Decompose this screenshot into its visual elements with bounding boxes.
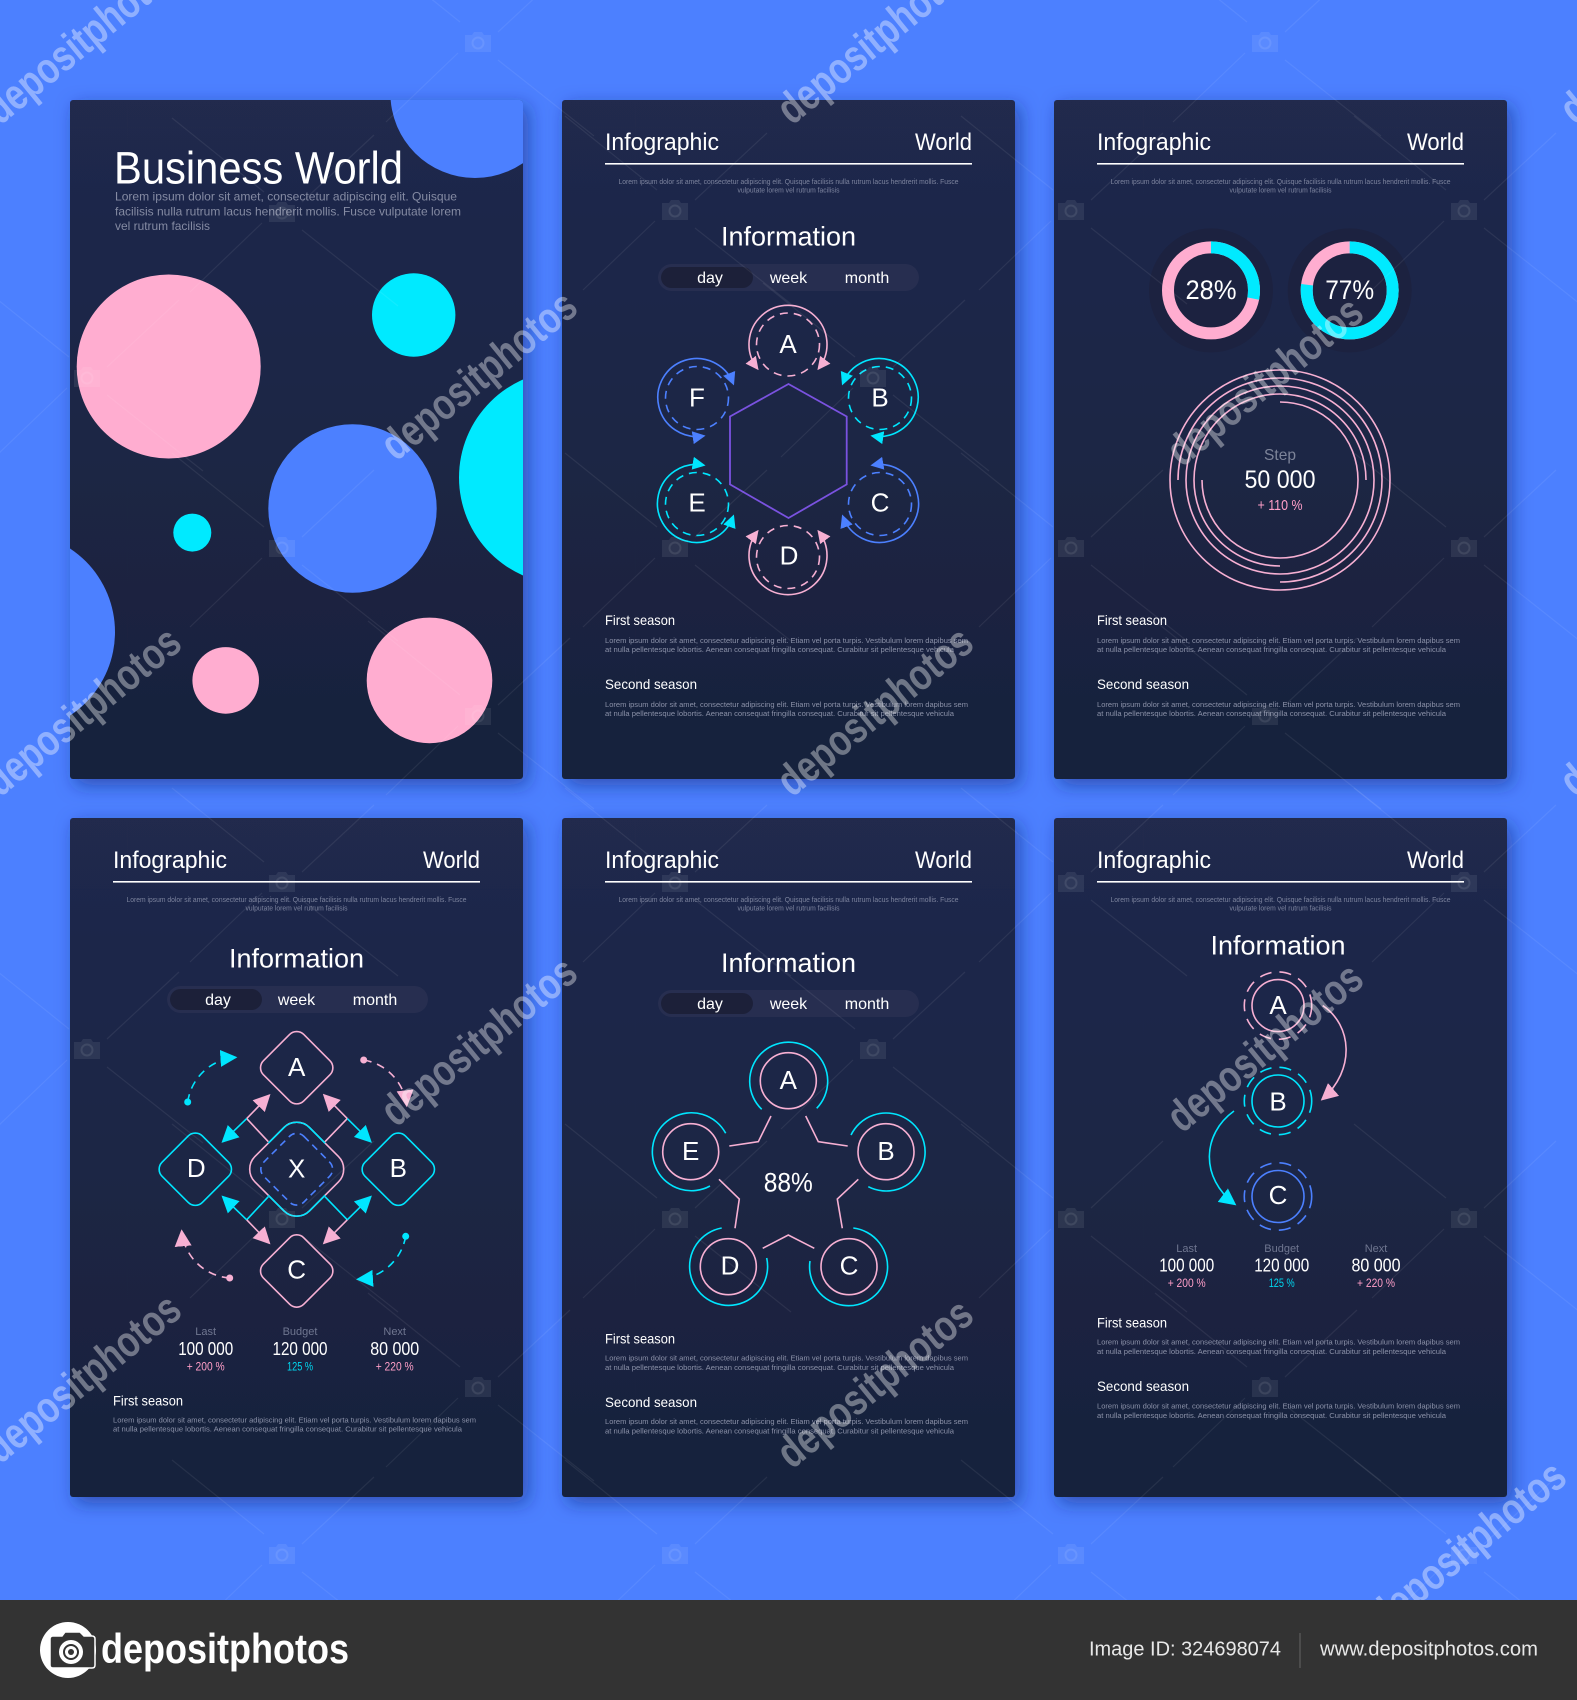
heading: information: Information: [721, 222, 856, 252]
first season text: Lorem ipsum dolor sit amet, consectetur adipiscing elit. Etiam vel porta turpis. Vestibulum lorem dapibus sem: [1097, 1340, 1460, 1346]
second season text: at nulla pellentesque lobortis. Aenean consequat fringilla consequat. Curabitur sit pellentesque vehicula: [1097, 1413, 1446, 1420]
stats: Budget: [1264, 1243, 1299, 1255]
first season text: at nulla pellentesque lobortis. Aenean consequat fringilla consequat. Curabitur sit pellentesque vehicula: [1097, 1349, 1446, 1356]
second season text: at nulla pellentesque lobortis. Aenean consequat fringilla consequat. Curabitur sit pellentesque vehicula: [605, 711, 954, 718]
header: Infographic: [1097, 847, 1211, 874]
second season text: Second season: [605, 676, 697, 692]
header: Infographic: [605, 847, 719, 874]
diamond D: [155, 1129, 236, 1210]
header: World: [915, 129, 972, 156]
stats: + 220 %: [376, 1359, 414, 1373]
donut 77%: 77%: [1325, 275, 1374, 305]
stats: Next: [1365, 1243, 1387, 1255]
first season text: Lorem ipsum dolor sit amet, consectetur adipiscing elit. Etiam vel porta turpis. Vestibulum lorem dapibus sem: [605, 638, 968, 645]
stats: 80 000: [1352, 1256, 1400, 1276]
panel: flow steps: [1054, 818, 1507, 1497]
first season text: Lorem ipsum dolor sit amet, consectetur adipiscing elit. Etiam vel porta turpis. Vestibulum lorem dapibus sem: [605, 1356, 968, 1363]
title: Business World: [114, 142, 403, 194]
icon: camera logo: [40, 1622, 96, 1678]
diamond X: X: [288, 1154, 305, 1184]
spiral chart: 50 000: [1244, 466, 1316, 494]
heading: information: Information: [1210, 930, 1346, 960]
subtitle: [115, 190, 461, 233]
subtitle: Lorem ipsum dolor sit amet, consectetur adipiscing elit. Quisque: [115, 190, 457, 204]
diamond C: C: [287, 1254, 306, 1284]
node E: E: [688, 488, 706, 518]
first season text: First season: [605, 1330, 675, 1346]
node E: [657, 464, 733, 542]
stats: + 220 %: [1357, 1276, 1395, 1290]
tabs: day: [205, 992, 231, 1009]
tabs: day: [697, 996, 723, 1013]
node E: [652, 1113, 726, 1191]
second season text: [605, 1394, 968, 1436]
node E: E: [682, 1136, 699, 1166]
stats: Budget: [283, 1326, 317, 1338]
header: [605, 847, 972, 913]
footer bar: [0, 1600, 1577, 1700]
image id: Image ID: 324698074: [1089, 1639, 1281, 1661]
second season text: Second season: [1097, 1378, 1189, 1394]
diamond B: [358, 1129, 439, 1210]
tabs: [658, 990, 919, 1017]
watermark: text: depositphotos: [371, 281, 587, 470]
tabs: month: [353, 992, 397, 1009]
donut 28%: [1149, 228, 1273, 352]
tabs: week: [769, 996, 808, 1013]
header: World: [915, 847, 972, 874]
first season text: at nulla pellentesque lobortis. Aenean consequat fringilla consequat. Curabitur sit pellentesque vehicula: [1097, 647, 1446, 654]
header: Lorem ipsum dolor sit amet, consectetur adipiscing elit. Quisque facilisis nulla rutrum lacus hendrerit mollis. Fusce: [126, 897, 467, 904]
header: Infographic: [605, 129, 719, 156]
second season text: Lorem ipsum dolor sit amet, consectetur adipiscing elit. Etiam vel porta turpis. Vestibulum lorem dapibus sem: [605, 1419, 968, 1426]
second season text: [1097, 676, 1460, 718]
center value: 88%: [764, 1168, 813, 1198]
node A: A: [779, 329, 797, 359]
first season text: First season: [605, 612, 675, 628]
separator: [1300, 1633, 1301, 1668]
heading: information: Information: [721, 948, 856, 978]
header: vulputate lorem vel rutrum facilisis: [246, 906, 348, 913]
tabs: [167, 986, 428, 1013]
header: Infographic: [1097, 129, 1211, 156]
first season text: at nulla pellentesque lobortis. Aenean consequat fringilla consequat. Curabitur sit pellentesque vehicula: [605, 647, 954, 654]
second season text: [1097, 1378, 1460, 1420]
subtitle: facilisis nulla rutrum lacus hendrerit mollis. Fusce vulputate lorem: [115, 204, 461, 218]
second season text: Second season: [605, 1394, 697, 1410]
first season text: Lorem ipsum dolor sit amet, consectetur adipiscing elit. Etiam vel porta turpis. Vestibulum lorem dapibus sem: [113, 1418, 476, 1424]
logo text: depositphotos: [101, 1625, 349, 1672]
stats: Next: [383, 1326, 406, 1338]
step A: A: [1269, 990, 1287, 1020]
second season text: at nulla pellentesque lobortis. Aenean consequat fringilla consequat. Curabitur sit pellentesque vehicula: [1097, 711, 1446, 718]
first season text: at nulla pellentesque lobortis. Aenean consequat fringilla consequat. Curabitur sit pellentesque vehicula: [113, 1427, 462, 1434]
node F: F: [689, 382, 705, 412]
tabs: week: [277, 992, 316, 1009]
step B: [1244, 1067, 1312, 1135]
node B: [851, 1113, 925, 1191]
watermark: text: depositphotos: [767, 1289, 983, 1478]
watermark: text: depositphotos: [1157, 287, 1373, 476]
diamond X: [242, 1115, 351, 1224]
header: Lorem ipsum dolor sit amet, consectetur adipiscing elit. Quisque facilisis nulla rutrum lacus hendrerit mollis. Fusce: [1110, 179, 1451, 186]
first season text: [605, 612, 968, 654]
stats: 120 000: [1254, 1256, 1309, 1276]
node D: D: [780, 540, 798, 570]
panel: business world cover: [64, 96, 538, 796]
diamond A: [256, 1027, 337, 1108]
second season text: Lorem ipsum dolor sit amet, consectetur adipiscing elit. Etiam vel porta turpis. Vestibulum lorem dapibus sem: [605, 702, 968, 709]
second season text: [605, 676, 968, 718]
node A: [750, 1042, 828, 1109]
header: vulputate lorem vel rutrum facilisis: [1230, 188, 1332, 195]
header: vulputate lorem vel rutrum facilisis: [738, 188, 840, 195]
stats: [1159, 1243, 1400, 1290]
tabs: week: [769, 270, 808, 287]
tabs: day: [697, 270, 723, 287]
donut 28%: 28%: [1186, 275, 1236, 305]
panel: donuts and spiral: [1054, 100, 1507, 779]
first season text: at nulla pellentesque lobortis. Aenean consequat fringilla consequat. Curabitur sit pellentesque vehicula: [605, 1365, 954, 1372]
hexagon: [730, 384, 847, 518]
spiral chart: Step: [1264, 447, 1296, 464]
diamond C: [256, 1231, 337, 1311]
node B: [843, 358, 918, 436]
stats: Last: [1176, 1243, 1197, 1255]
watermark: text: depositphotos: [767, 617, 983, 806]
watermark: text: depositphotos: [371, 947, 587, 1136]
stats: 100 000: [178, 1339, 233, 1359]
node F: [658, 358, 733, 436]
header: vulputate lorem vel rutrum facilisis: [1230, 906, 1332, 913]
header: [113, 847, 480, 913]
watermark: text: depositphotos: [1157, 953, 1373, 1142]
node D: [749, 526, 827, 595]
second season text: Lorem ipsum dolor sit amet, consectetur adipiscing elit. Etiam vel porta turpis. Vestibulum lorem dapibus sem: [1097, 1404, 1460, 1410]
first season text: Lorem ipsum dolor sit amet, consectetur adipiscing elit. Etiam vel porta turpis. Vestibulum lorem dapibus sem: [1097, 638, 1460, 645]
spiral chart: + 110 %: [1258, 497, 1302, 514]
first season text: [1097, 612, 1460, 654]
node B: B: [877, 1136, 895, 1166]
node C: C: [871, 488, 889, 518]
panel: hexagon cycle: [562, 100, 1015, 779]
header: [605, 129, 972, 195]
step C: [1244, 1163, 1312, 1230]
first season text: [1097, 1314, 1460, 1356]
stats: + 200 %: [1168, 1276, 1206, 1290]
stats: + 200 %: [187, 1359, 225, 1373]
tabs: month: [845, 996, 889, 1013]
node D: [690, 1228, 768, 1305]
connectors: [719, 1116, 858, 1248]
orbit arrows: [182, 1056, 409, 1282]
header: Lorem ipsum dolor sit amet, consectetur adipiscing elit. Quisque facilisis nulla rutrum lacus hendrerit mollis. Fusce: [618, 897, 959, 904]
diamond B: B: [390, 1153, 407, 1183]
decorative circles: [70, 100, 523, 744]
header: Lorem ipsum dolor sit amet, consectetur adipiscing elit. Quisque facilisis nulla rutrum lacus hendrerit mollis. Fusce: [618, 179, 959, 186]
node D: D: [721, 1250, 739, 1280]
subtitle: vel rutrum facilisis: [115, 219, 210, 233]
node C: [810, 1228, 888, 1306]
node C: C: [840, 1250, 858, 1280]
step B: B: [1269, 1086, 1287, 1116]
stats: 125 %: [1269, 1276, 1295, 1290]
stats: 120 000: [272, 1339, 328, 1359]
header: vulputate lorem vel rutrum facilisis: [738, 906, 840, 913]
second season text: Second season: [1097, 676, 1189, 692]
stats: 100 000: [1159, 1256, 1214, 1276]
node A: [749, 305, 827, 376]
spiral chart: [1170, 370, 1390, 590]
node B: B: [871, 382, 889, 412]
second season text: Lorem ipsum dolor sit amet, consectetur adipiscing elit. Etiam vel porta turpis. Vestibulum lorem dapibus sem: [1097, 702, 1460, 709]
header: World: [423, 847, 480, 874]
tabs: month: [845, 270, 889, 287]
website: www.depositphotos.com: [1319, 1639, 1538, 1661]
header: World: [1407, 847, 1464, 874]
first season text: [605, 1330, 968, 1372]
header: Infographic: [113, 847, 227, 874]
first season text: First season: [113, 1392, 183, 1408]
stats: [178, 1326, 419, 1373]
header: [1097, 847, 1464, 913]
diamond A: A: [288, 1052, 306, 1082]
panel: pentagon diagram: [562, 818, 1015, 1497]
step A: [1244, 972, 1312, 1039]
stats: 125 %: [287, 1359, 313, 1373]
arrow A to B: [1322, 1006, 1346, 1100]
first season text: First season: [1097, 1314, 1167, 1330]
node A: A: [780, 1065, 798, 1095]
donut 77%: [1288, 228, 1412, 352]
connector arrows: [223, 1095, 371, 1243]
header: Lorem ipsum dolor sit amet, consectetur adipiscing elit. Quisque facilisis nulla rutrum lacus hendrerit mollis. Fusce: [1110, 897, 1451, 904]
arrow B to C: [1209, 1111, 1235, 1204]
panel: diamond diagram: [70, 818, 523, 1497]
second season text: at nulla pellentesque lobortis. Aenean consequat fringilla consequat. Curabitur sit pellentesque vehicula: [605, 1429, 954, 1436]
heading: information: Information: [229, 944, 364, 974]
header: [1097, 129, 1464, 195]
step C: C: [1269, 1180, 1287, 1210]
diamond D: D: [187, 1153, 206, 1183]
stats: Last: [195, 1326, 216, 1338]
header: World: [1407, 129, 1464, 156]
first season text: First season: [1097, 612, 1167, 628]
node C: [843, 464, 919, 542]
first season text: [113, 1392, 476, 1434]
tabs: [658, 264, 919, 291]
stats: 80 000: [370, 1339, 419, 1359]
